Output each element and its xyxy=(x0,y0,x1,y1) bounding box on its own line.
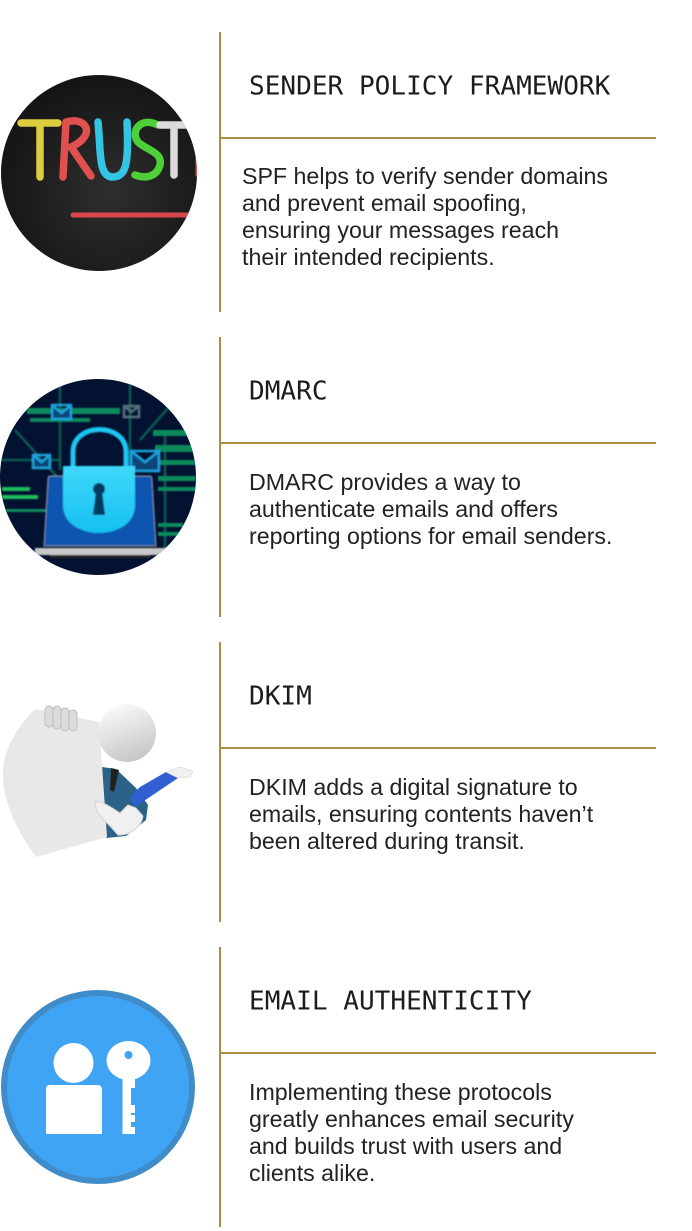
heading: sender policy framework: SENDER POLICY FRAMEWORK xyxy=(249,72,611,102)
icon: trust chalkboard photo xyxy=(0,74,198,272)
paper xyxy=(3,709,107,857)
hand xyxy=(95,802,143,835)
text: SPF description: and prevent email spoofing, xyxy=(242,190,527,216)
horizontal rule: section 1 xyxy=(220,137,656,139)
text: email authenticity description: and builds trust with users and xyxy=(249,1133,562,1159)
heading: DMARC: DMARC xyxy=(249,376,328,406)
text: email authenticity description: Implementing these protocols xyxy=(249,1079,552,1105)
text: DMARC description: authenticate emails and offers xyxy=(249,496,558,522)
text: SPF description: ensuring your messages reach xyxy=(242,217,559,243)
text: email authenticity description: greatly enhances email security xyxy=(249,1106,574,1132)
suit xyxy=(102,767,148,838)
text: SPF description: their intended recipients. xyxy=(242,244,495,270)
text: email authenticity description: clients alike. xyxy=(249,1160,375,1186)
section: email authenticity xyxy=(4,947,656,1227)
section: DMARC xyxy=(0,337,656,617)
horizontal rule: section 3 xyxy=(220,747,656,749)
text: DMARC description: reporting options for email senders. xyxy=(249,523,612,549)
padlock xyxy=(73,430,126,470)
envelopes xyxy=(33,405,159,471)
text: DMARC description: DMARC provides a way to xyxy=(249,469,521,495)
pen xyxy=(130,772,178,807)
vertical rule: section 4 xyxy=(219,947,221,1227)
icon: padlock over laptop photo xyxy=(0,379,196,575)
section: sender policy framework xyxy=(0,32,656,312)
laptop xyxy=(44,476,156,546)
text: DKIM description: been altered during transit. xyxy=(249,828,525,854)
section: DKIM xyxy=(3,642,656,922)
heading: email authenticity: EMAIL AUTHENTICITY xyxy=(249,986,532,1016)
text: SPF description: SPF helps to verify sender domains xyxy=(242,163,608,189)
horizontal rule: section 4 xyxy=(220,1052,656,1054)
vertical rule: section 1 xyxy=(219,32,221,312)
vertical rule: section 2 xyxy=(219,337,221,617)
text: DKIM description: DKIM adds a digital signature to xyxy=(249,774,578,800)
heading: DKIM: DKIM xyxy=(249,682,312,712)
icon: figure holding paper and pen xyxy=(3,704,193,857)
icon: person and key badge xyxy=(4,993,192,1181)
vertical rule: section 3 xyxy=(219,642,221,922)
horizontal rule: section 2 xyxy=(220,442,656,444)
text: DKIM description: emails, ensuring contents haven’t xyxy=(249,801,594,827)
head xyxy=(98,704,156,762)
